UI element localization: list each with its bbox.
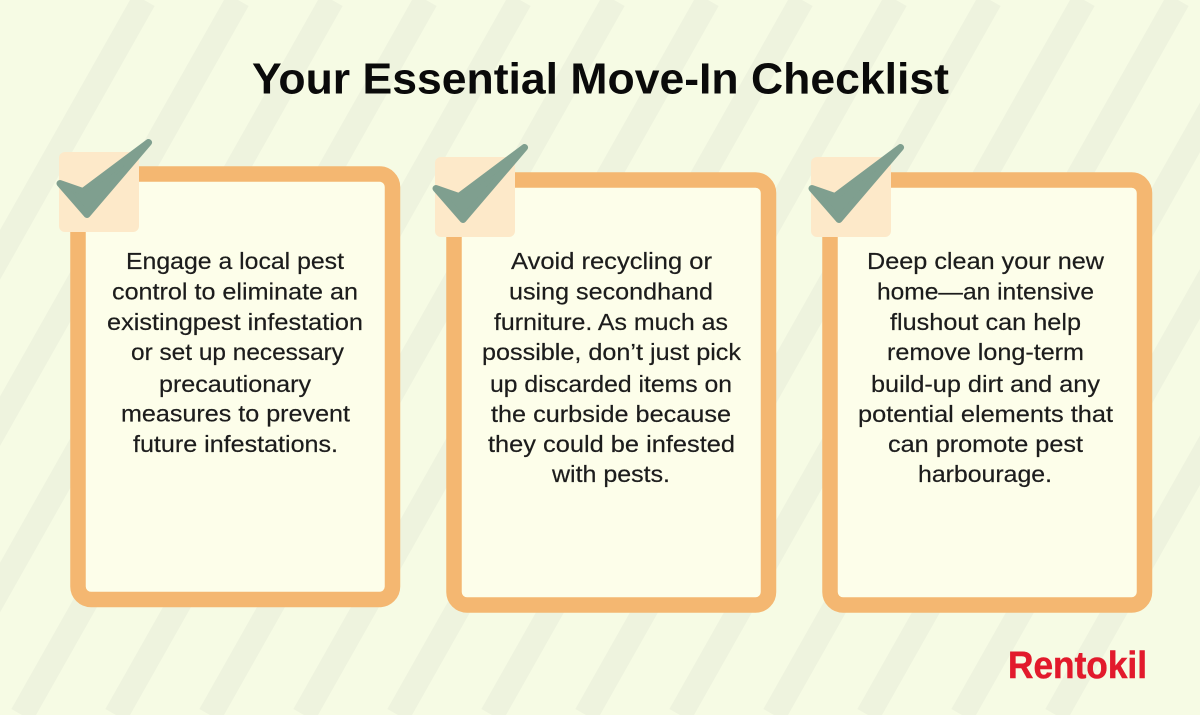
card 2 frame [454, 180, 768, 605]
card 1 text: Engage a local pest [126, 248, 345, 274]
card 2 text: with pests. [551, 461, 670, 487]
panel: card 2 [435, 148, 768, 605]
title: Your Essential Move-In Checklist [252, 54, 949, 104]
card 2 text: Avoid recycling or [511, 248, 712, 274]
card 3 text: flushout can help [890, 309, 1081, 335]
card 2 text [482, 248, 742, 487]
card 3 text: Deep clean your new [867, 248, 1104, 274]
card 3 text: remove long-term [887, 339, 1084, 365]
card 2 text: possible, don’t just pick [482, 339, 742, 365]
card 3 text: home—an intensive [877, 278, 1094, 304]
card 3 frame [830, 180, 1144, 605]
card 2 text: the curbside because [491, 401, 731, 427]
card 1 text: or set up necessary [131, 339, 345, 365]
card 2 text: they could be infested [488, 431, 735, 457]
card 1 text: future infestations. [133, 431, 338, 457]
card 3 text: potential elements that [858, 401, 1114, 427]
card 1 text: measures to prevent [121, 400, 351, 426]
card 2 text: up discarded items on [490, 371, 732, 397]
logo: Rentokil: Rentokil [1008, 645, 1147, 687]
card 1 text: existingpest infestation [107, 309, 363, 335]
card 1 text: precautionary [159, 371, 312, 397]
card 1 frame [78, 174, 392, 600]
card 3 text: build-up dirt and any [871, 371, 1101, 397]
card 2 text: using secondhand [509, 278, 713, 304]
card 1 text: control to eliminate an [112, 278, 358, 304]
card 3 text: harbourage. [918, 461, 1052, 487]
card 3 text: can promote pest [888, 431, 1084, 457]
panel: card 1 [59, 142, 392, 600]
card 1 text [107, 248, 363, 457]
card 2 text: furniture. As much as [494, 309, 728, 335]
card 3 text [858, 248, 1114, 487]
panel: card 3 [811, 148, 1144, 605]
icon: card 1 checkbox [59, 142, 148, 232]
icon: card 2 checkbox [435, 148, 524, 237]
icon: card 3 checkbox [811, 148, 900, 237]
